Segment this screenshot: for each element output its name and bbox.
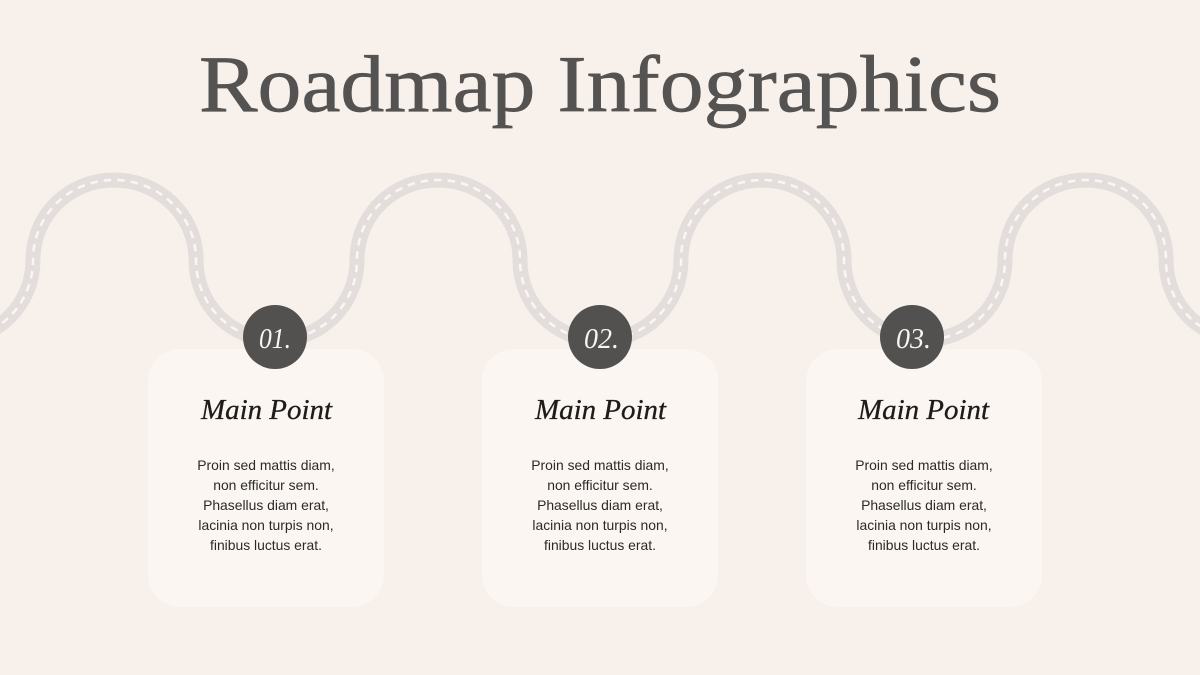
text block 1: Proin sed mattis diam, [197, 457, 335, 473]
text block 1 [197, 457, 335, 553]
panel: point 1 [148, 305, 384, 607]
text block 3: non efficitur sem. [871, 477, 977, 493]
text block 3: finibus luctus erat. [868, 537, 980, 553]
text block 1: finibus luctus erat. [210, 537, 322, 553]
heading: main point 2: Main Point [534, 394, 667, 426]
text block 2: Proin sed mattis diam, [531, 457, 669, 473]
text block 3: lacinia non turpis non, [856, 517, 992, 533]
badge 03 [880, 305, 944, 369]
badge 03: 03. [896, 323, 931, 355]
text block 3: Phasellus diam erat, [861, 497, 987, 513]
text block 2: finibus luctus erat. [544, 537, 656, 553]
text block 2: Phasellus diam erat, [537, 497, 663, 513]
panel: point 2 [482, 305, 718, 607]
text block 1: non efficitur sem. [213, 477, 319, 493]
text block 2 [531, 457, 669, 553]
text block 1: lacinia non turpis non, [198, 517, 334, 533]
badge 02: 02. [584, 323, 619, 355]
badge 01: 01. [259, 323, 291, 355]
heading: main point 1: Main Point [200, 394, 333, 426]
heading: main point 3: Main Point [857, 394, 990, 426]
text block 2: non efficitur sem. [547, 477, 653, 493]
text block 3: Proin sed mattis diam, [855, 457, 993, 473]
text block 1: Phasellus diam erat, [203, 497, 329, 513]
text block 3 [855, 457, 993, 553]
badge 02 [568, 305, 632, 369]
panel: point 3 [806, 305, 1042, 607]
text block 2: lacinia non turpis non, [532, 517, 668, 533]
winding road [0, 180, 1200, 340]
title: Roadmap Infographics [199, 39, 1001, 129]
badge 01 [243, 305, 307, 369]
